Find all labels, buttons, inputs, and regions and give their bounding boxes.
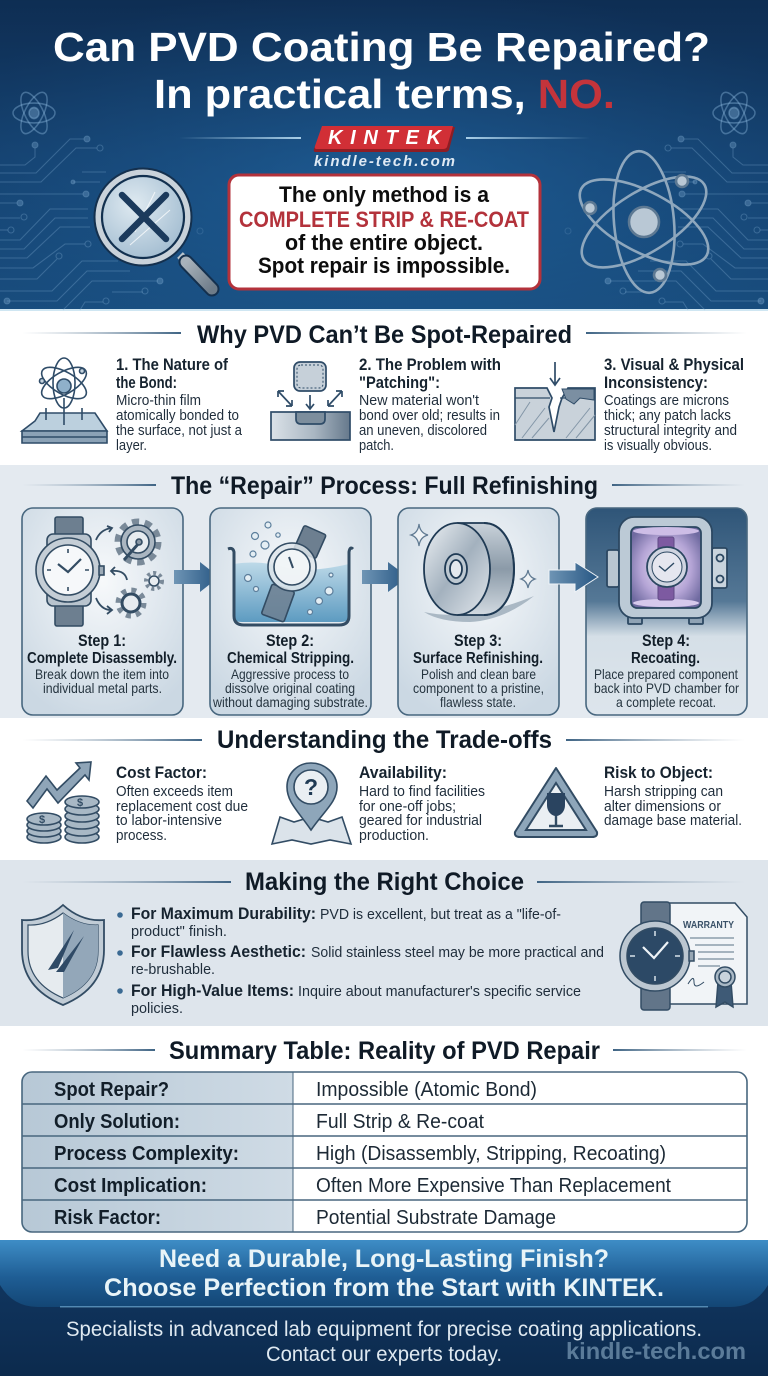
text: nature of the bond (116, 355, 243, 454)
text: nature of the bond: the surface, not just a (116, 423, 243, 439)
text: problem with patching: 2. The Problem with (359, 355, 501, 374)
panel: trade-offs (0, 718, 768, 860)
heading: The “Repair” Process: Full Refinishing (171, 472, 598, 500)
icon: coins and rising arrow (27, 762, 99, 843)
text: cost factor (116, 763, 248, 844)
footer text (66, 1318, 702, 1366)
list: recommendations: For High-Value Items: (131, 982, 294, 1000)
icon: atom (567, 149, 721, 295)
text: problem with patching: bond over old; results in (359, 408, 500, 424)
heading: Making the Right Choice (245, 868, 524, 896)
text: visual and physical inconsistency: is visually obvious. (604, 438, 712, 454)
text: problem with patching (359, 355, 501, 454)
card: step 4: back into PVD chamber for (594, 680, 739, 696)
heading: Summary Table: Reality of PVD Repair (169, 1037, 600, 1065)
card: step 1: Step 1: (78, 631, 126, 650)
panel: footer call to action (0, 1240, 768, 1376)
card: step 2: Step 2: (266, 631, 314, 650)
text: problem with patching: an uneven, discolored (359, 423, 487, 439)
text: cost factor: Often exceeds item (116, 784, 233, 800)
callout: strip and re-coat: Spot repair is impossible. (258, 253, 510, 278)
heading: Understanding the Trade-offs (217, 726, 552, 754)
table: Often More Expensive Than Replacement (316, 1175, 671, 1197)
heading: Why PVD Can’t Be Spot-Repaired (197, 321, 572, 349)
footer text: Specialists in advanced lab equipment for precise coating applications. (66, 1318, 702, 1341)
list: recommendations (117, 905, 604, 1017)
logo: KINTEK (179, 126, 590, 170)
icon: crack in coating (515, 362, 595, 440)
panel: making the right choice (0, 860, 768, 1026)
text: availability (359, 763, 485, 844)
text: problem with patching: "Patching": (359, 373, 440, 392)
list: recommendations: re-brushable. (131, 961, 215, 978)
title: In practical terms, NO. (154, 71, 615, 117)
card: step 4: a complete recoat. (616, 694, 716, 710)
logo: KINTEK: KINTEK (328, 127, 443, 149)
panel: why PVD can't be spot-repaired (0, 311, 768, 465)
footer text: Contact our experts today. (266, 1343, 502, 1366)
text: nature of the bond: atomically bonded to (116, 408, 239, 424)
callout: strip and re-coat: COMPLETE STRIP & RE-COAT (239, 207, 530, 232)
card: step 2: Chemical Stripping. (227, 650, 354, 667)
icon: watch and warranty certificate (620, 902, 747, 1010)
list: recommendations: policies. (131, 1000, 183, 1017)
text: risk to object: damage base material. (604, 813, 742, 829)
text: cost factor: Cost Factor: (116, 763, 207, 782)
icon: watch in chemical bath (228, 522, 353, 625)
card: step 1: individual metal parts. (43, 680, 162, 696)
cta headline: Choose Perfection from the Start with KINTEK. (104, 1274, 664, 1302)
icon: atom over bonded surface (22, 358, 107, 443)
text: risk to object: Risk to Object: (604, 763, 713, 782)
arrow: step 3 to 4 (549, 562, 598, 592)
callout: strip and re-coat (229, 175, 540, 289)
table: Potential Substrate Damage (316, 1207, 556, 1229)
text: visual and physical inconsistency: Inconsistency: (604, 373, 708, 392)
card: step 4 (586, 508, 747, 715)
card: step 3: flawless state. (440, 694, 516, 710)
table: Full Strip & Re-coat (316, 1111, 484, 1133)
icon: magnifying glass with X (94, 168, 212, 289)
text: risk to object: Harsh stripping can (604, 784, 723, 800)
card: step 2: Aggressive process to (231, 666, 349, 682)
cta headline (104, 1245, 664, 1302)
website watermark: kindle-tech.com (566, 1338, 746, 1364)
text: problem with patching: patch. (359, 438, 394, 454)
text: risk to object: alter dimensions or (604, 799, 721, 815)
card: step 4: Place prepared component (594, 666, 738, 682)
card: step 3: Polish and clean bare (421, 666, 536, 682)
card: step 3: Surface Refinishing. (413, 650, 543, 667)
panel: repair process (0, 465, 768, 718)
table (22, 1072, 747, 1232)
text: nature of the bond: the Bond: (116, 373, 177, 392)
text: visual and physical inconsistency: thick; any patch lacks (604, 408, 731, 424)
text: visual and physical inconsistency: 3. Visual & Physical (604, 355, 744, 374)
text: cost factor: process. (116, 828, 167, 844)
table: Process Complexity: (54, 1143, 239, 1165)
text: cost factor: replacement cost due (116, 799, 248, 815)
arrow: step 2 to 3 (362, 562, 408, 592)
list: recommendations: For Maximum Durability: (131, 905, 316, 923)
icon: watch and gears (36, 517, 162, 626)
table: Only Solution: (54, 1111, 180, 1133)
card: step 1: Complete Disassembly. (27, 650, 177, 667)
list: recommendations: product" finish. (131, 923, 227, 940)
cta headline: Need a Durable, Long-Lasting Finish? (159, 1245, 609, 1273)
text: availability: Hard to find facilities (359, 784, 485, 800)
icon: coins and rising arrow: $ (39, 814, 45, 826)
icon: warning triangle with broken glass (515, 768, 597, 837)
list: recommendations: PVD is excellent, but treat as a "life-of- (320, 906, 561, 923)
card: step 1: Break down the item into (35, 666, 169, 682)
text: availability: for one-off jobs; (359, 799, 456, 815)
card: step 4: Step 4: (642, 631, 690, 650)
text: availability: Availability: (359, 763, 447, 782)
callout: strip and re-coat: of the entire object. (285, 230, 483, 255)
icon: watch and warranty certificate: WARRANTY (683, 919, 734, 931)
card: step 1 (22, 508, 183, 715)
panel: summary table (0, 1026, 768, 1240)
icon: patch over base (271, 362, 350, 440)
text: nature of the bond: layer. (116, 438, 147, 454)
table: Cost Implication: (54, 1175, 207, 1197)
icon: map pin with question mark (272, 763, 351, 844)
table: Impossible (Atomic Bond) (316, 1079, 537, 1101)
card: step 4: Recoating. (631, 650, 700, 667)
icon: polishing disc (411, 523, 535, 622)
icon: map pin with question mark: ? (304, 774, 318, 800)
table: Spot Repair? (54, 1079, 169, 1101)
text: nature of the bond: Micro-thin film (116, 393, 201, 409)
title: Can PVD Coating Be Repaired? (53, 24, 710, 70)
card: step 2 (210, 508, 371, 715)
text: availability: geared for industrial (359, 813, 482, 829)
arrow: step 1 to 2 (174, 562, 219, 592)
title (53, 24, 710, 117)
callout: strip and re-coat: The only method is a (279, 182, 490, 207)
table: High (Disassembly, Stripping, Recoating) (316, 1143, 666, 1165)
text: risk to object (604, 763, 742, 829)
panel: header (0, 0, 768, 311)
text: visual and physical inconsistency: structural integrity and (604, 423, 737, 439)
card: step 3: component to a pristine, (413, 680, 544, 696)
icon: scratched shield (22, 905, 104, 1005)
card: step 3 (398, 508, 559, 715)
card: step 3: Step 3: (454, 631, 502, 650)
text: visual and physical inconsistency: Coatings are microns (604, 393, 729, 409)
icon: PVD chamber (607, 517, 727, 624)
table: Risk Factor: (54, 1207, 161, 1229)
list: recommendations: Inquire about manufacturer's specific service (298, 983, 581, 1000)
text: cost factor: to labor-intensive (116, 813, 222, 829)
list: recommendations: Solid stainless steel may be more practical and (311, 944, 604, 961)
list: recommendations: For Flawless Aesthetic: (131, 943, 306, 961)
text: visual and physical inconsistency (604, 355, 744, 454)
text: problem with patching: New material won't (359, 393, 479, 409)
text: availability: production. (359, 828, 429, 844)
card: step 2: dissolve original coating (225, 680, 355, 696)
card: step 2: without damaging substrate. (212, 694, 368, 710)
text: nature of the bond: 1. The Nature of (116, 355, 228, 374)
icon: coins and rising arrow: $ (77, 797, 83, 809)
logo: KINTEK: kindle-tech.com (314, 153, 455, 170)
